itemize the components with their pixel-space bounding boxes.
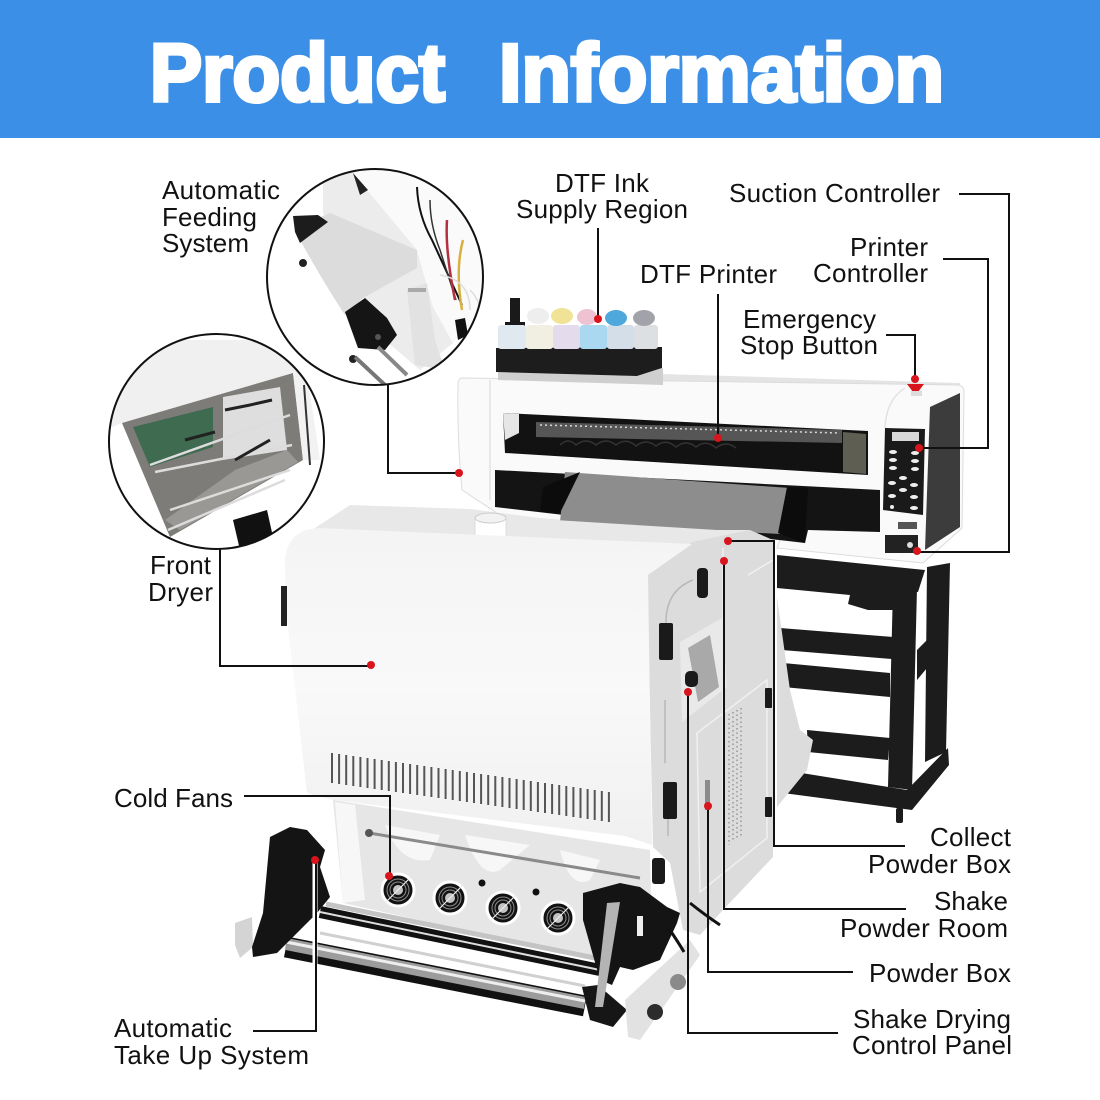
callout: automatic feeding system bbox=[162, 175, 463, 477]
callout: automatic take up system: Take Up System bbox=[114, 1040, 309, 1070]
callout: powder box bbox=[704, 802, 1011, 988]
media roll bbox=[540, 472, 808, 543]
duct cap bbox=[475, 513, 506, 538]
callout: printer controller: Controller bbox=[813, 258, 928, 288]
callout: emergency stop button bbox=[740, 304, 919, 383]
suction controller box bbox=[885, 522, 918, 553]
cold fans bbox=[382, 874, 574, 934]
control panel bbox=[883, 428, 925, 515]
callout: shake powder room bbox=[720, 557, 1008, 943]
rod bbox=[369, 833, 640, 878]
printer side panel bbox=[925, 393, 960, 550]
callout: shake powder room: Powder Room bbox=[840, 913, 1008, 943]
callout: suction controller bbox=[729, 178, 1009, 555]
printer stand bbox=[777, 555, 950, 823]
callout: shake drying control panel bbox=[684, 688, 1012, 1060]
dryer front face bbox=[285, 528, 692, 845]
title bbox=[150, 28, 944, 119]
callout: DTF printer bbox=[640, 259, 777, 442]
callout: DTF ink supply region: DTF Ink bbox=[555, 168, 650, 198]
DTF printer machine bbox=[458, 298, 964, 823]
callout: front dryer bbox=[148, 548, 375, 669]
dryer side panel bbox=[647, 530, 773, 935]
hanging film bbox=[777, 597, 813, 807]
lower fan bay bbox=[333, 800, 652, 960]
title: Information bbox=[499, 28, 944, 119]
callout: DTF ink supply region: Supply Region bbox=[516, 194, 688, 224]
callout: collect powder box: Powder Box bbox=[868, 849, 1011, 879]
powder box window bbox=[705, 780, 710, 810]
door vent dots bbox=[729, 708, 741, 845]
callout: cold fans bbox=[114, 783, 393, 880]
take-up system bbox=[235, 827, 720, 1040]
callout: cold fans: Cold Fans bbox=[114, 783, 233, 813]
detail circle: automatic feeding system bbox=[260, 165, 490, 390]
callout: front dryer: Front bbox=[150, 550, 212, 580]
callout: printer controller bbox=[813, 232, 988, 452]
header banner bbox=[0, 0, 1100, 138]
callout: DTF printer: DTF Printer bbox=[640, 259, 777, 289]
callout: DTF ink supply region bbox=[516, 168, 688, 323]
powder shaker dryer bbox=[281, 505, 773, 960]
ink supply tank bbox=[496, 298, 663, 385]
vents bbox=[332, 753, 609, 822]
callout: emergency stop button: Emergency bbox=[743, 304, 876, 334]
detail circle: front dryer bbox=[105, 330, 330, 555]
wire bbox=[665, 580, 693, 836]
left roller bracket bbox=[235, 827, 330, 958]
callout: automatic take up system bbox=[114, 856, 319, 1070]
door hinges and latches bbox=[659, 568, 772, 819]
right motor assembly bbox=[582, 858, 720, 1040]
printer top strip bbox=[662, 374, 960, 392]
shake drying panel surround bbox=[680, 618, 727, 722]
callout: emergency stop button: Stop Button bbox=[740, 330, 878, 360]
lower black band bbox=[495, 470, 880, 543]
title: Product bbox=[150, 28, 445, 119]
callout: automatic feeding system: System bbox=[162, 228, 249, 258]
callout: powder box: Powder Box bbox=[869, 958, 1011, 988]
callout: collect powder box: Collect bbox=[930, 822, 1012, 852]
callout: shake powder room: Shake bbox=[934, 886, 1008, 916]
shake drying panel bbox=[688, 635, 719, 702]
callout: shake drying control panel: Control Panel bbox=[852, 1030, 1012, 1060]
callout: automatic feeding system: Feeding bbox=[162, 202, 257, 232]
take-up rollers bbox=[286, 904, 600, 1006]
printer body bbox=[458, 378, 964, 563]
dryer top bbox=[312, 505, 750, 552]
callout: shake drying control panel: Shake Drying bbox=[853, 1004, 1011, 1034]
callout: front dryer: Dryer bbox=[148, 577, 213, 607]
callout: automatic take up system: Automatic bbox=[114, 1013, 232, 1043]
emergency stop button bbox=[907, 384, 924, 396]
print carriage window bbox=[503, 413, 868, 475]
callout: printer controller: Printer bbox=[850, 232, 928, 262]
callout: automatic feeding system: Automatic bbox=[162, 175, 280, 205]
callout: suction controller: Suction Controller bbox=[729, 178, 940, 208]
callout: collect powder box bbox=[724, 537, 1012, 879]
